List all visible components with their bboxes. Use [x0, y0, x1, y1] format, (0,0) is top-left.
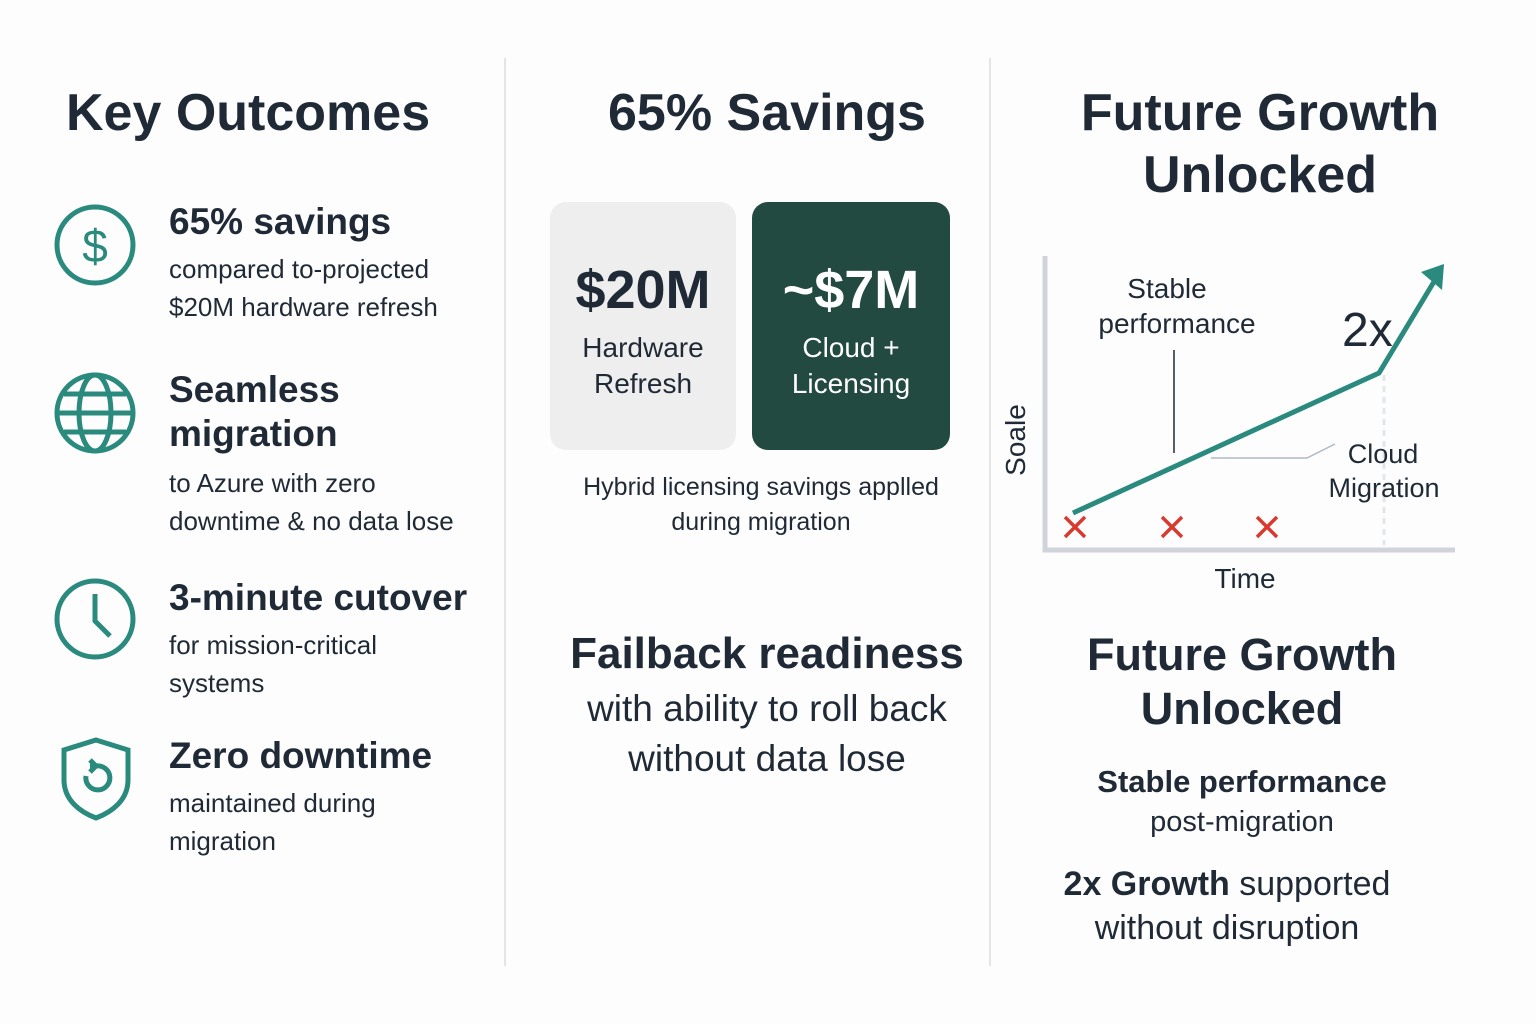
- icon: clock: [54, 578, 136, 660]
- text: failback readiness: without data lose: [628, 738, 906, 779]
- item: 3-minute cutover: systems: [169, 668, 264, 698]
- icon: dollar: [54, 204, 136, 286]
- card: $20M hardware refresh: [550, 202, 736, 450]
- panel: future growth: [1000, 84, 1455, 947]
- chart: scale over time: Stable: [1127, 273, 1207, 304]
- title: Future Growth Unlocked: Future Growth: [1081, 84, 1439, 142]
- icon: dollar: $: [82, 220, 108, 272]
- chart: scale over time: Soale: [1000, 404, 1031, 476]
- item: 65% savings: $20M hardware refresh: [169, 292, 438, 322]
- card: ~$7M cloud + licensing: Cloud +: [802, 332, 900, 363]
- panel: 65% savings: [550, 84, 964, 779]
- text: future growth summary: Stable performance: [1097, 764, 1387, 799]
- text: future growth summary: [1064, 629, 1397, 947]
- title: Future Growth Unlocked: Unlocked: [1143, 146, 1377, 204]
- text: future growth summary: without disruption: [1095, 909, 1359, 947]
- item: 65% savings: compared to-projected: [169, 254, 429, 284]
- item: zero downtime: migration: [169, 826, 276, 856]
- item: 3-minute cutover: 3-minute cutover: [169, 577, 467, 618]
- card: $20M hardware refresh: $20M: [575, 260, 711, 320]
- item: seamless migration: Seamless: [169, 369, 340, 410]
- text: hybrid licensing note: [583, 473, 939, 536]
- text: failback readiness: Failback readiness: [570, 629, 964, 678]
- item: 65% savings: [54, 201, 438, 322]
- item: seamless migration: downtime & no data lose: [169, 506, 454, 536]
- icon: globe: [54, 372, 136, 454]
- text: future growth summary: post-migration: [1150, 806, 1334, 838]
- chart: scale over time: Cloud: [1348, 439, 1418, 469]
- item: zero downtime: [62, 735, 432, 856]
- chart: scale over time: performance: [1098, 308, 1256, 339]
- text: future growth summary: Future Growth: [1087, 629, 1397, 680]
- panel: key outcomes: [54, 84, 467, 856]
- chart: scale over time: 2x: [1342, 304, 1393, 357]
- item: 3-minute cutover: [54, 577, 467, 698]
- item: zero downtime: maintained during: [169, 788, 376, 818]
- item: seamless migration: to Azure with zero: [169, 468, 376, 498]
- card: $20M hardware refresh: Hardware: [582, 332, 704, 363]
- chart: scale over time: Time: [1214, 563, 1276, 594]
- text: failback readiness: with ability to roll back: [587, 688, 947, 729]
- title: Key Outcomes: Key Outcomes: [66, 84, 430, 142]
- card: $20M hardware refresh: Refresh: [594, 368, 692, 399]
- item: seamless migration: migration: [169, 413, 338, 454]
- text: failback readiness: [570, 629, 964, 779]
- text: hybrid licensing note: Hybrid licensing savings applled: [583, 473, 939, 501]
- text: hybrid licensing note: during migration: [671, 508, 851, 536]
- chart: scale over time: [1000, 256, 1455, 594]
- title: 65% Savings: 65% Savings: [608, 84, 926, 142]
- item: 3-minute cutover: for mission-critical: [169, 630, 377, 660]
- item: zero downtime: Zero downtime: [169, 735, 432, 776]
- item: seamless migration: [54, 369, 454, 536]
- chart: scale over time: Migration: [1328, 473, 1440, 503]
- card: ~$7M cloud + licensing: [752, 202, 950, 450]
- card: ~$7M cloud + licensing: Licensing: [792, 368, 910, 399]
- title: Future Growth Unlocked: [1081, 84, 1439, 204]
- icon: shield: [62, 737, 130, 821]
- text: future growth summary: 2x Growth supported: [1064, 865, 1390, 903]
- text: future growth summary: Unlocked: [1141, 683, 1343, 734]
- card: ~$7M cloud + licensing: ~$7M: [783, 260, 919, 320]
- item: 65% savings: 65% savings: [169, 201, 391, 242]
